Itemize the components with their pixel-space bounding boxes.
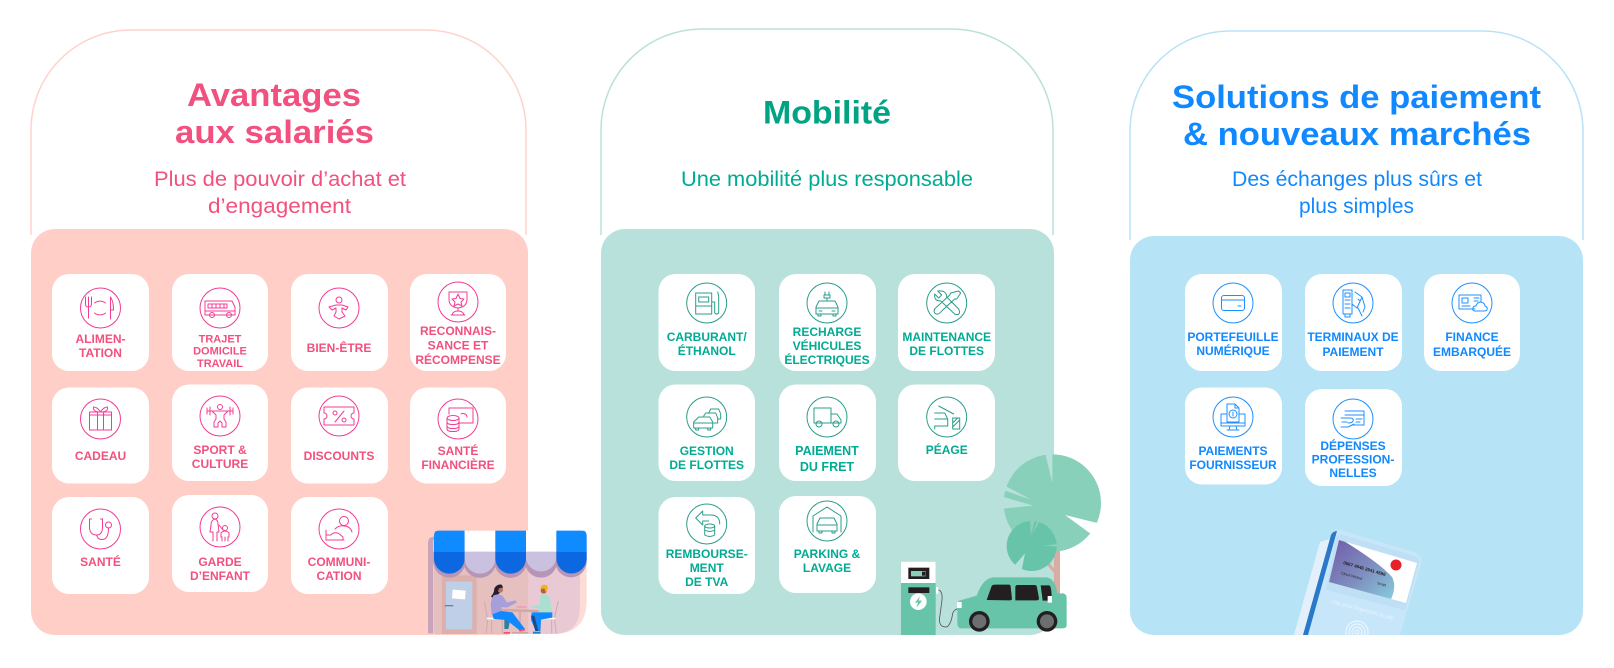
subheading: échanges plus sûrs: plus simples <box>1299 195 1414 218</box>
panel: solutions de paiement <box>1130 31 1583 643</box>
label: PAIEMENTS <box>1198 444 1268 458</box>
tile: santé <box>52 497 149 594</box>
label: ÉLECTRIQUES <box>784 352 870 367</box>
label: FINANCE <box>1445 330 1499 344</box>
icon: plate and cutlery <box>80 288 120 328</box>
tile: maintenance de flottes <box>898 274 995 371</box>
icon: person and megaphone <box>319 509 359 549</box>
label: GESTION <box>680 444 734 458</box>
icon: toll barrier <box>927 397 967 437</box>
heading: mobilité: Mobilité <box>763 94 891 130</box>
charging station <box>901 562 938 635</box>
tile: garde d'enfant <box>172 495 268 592</box>
label: SPORT & <box>193 443 247 457</box>
label: DISCOUNTS <box>304 449 374 463</box>
icon: wallet card <box>1213 283 1253 323</box>
icon: card and cloud <box>1452 283 1492 323</box>
icon: invoice on monitor <box>1213 397 1253 437</box>
label: DÉPENSES <box>1320 438 1386 453</box>
label: EMBARQUÉE <box>1433 344 1511 359</box>
tile: parking et lavage <box>779 496 876 593</box>
label: FINANCIÈRE <box>421 457 495 472</box>
label: LAVAGE <box>803 561 851 575</box>
icon: weightlifter <box>200 396 240 436</box>
credit card <box>1329 540 1417 603</box>
label: TATION <box>79 346 122 360</box>
label: TERMINAUX DE <box>1307 330 1399 344</box>
icon: coins and return arrow <box>687 504 727 544</box>
label: MENT <box>690 561 724 575</box>
device back <box>1294 535 1342 635</box>
teal background block <box>601 229 1054 635</box>
label: DE FLOTTES <box>669 458 744 472</box>
tile: cadeau <box>52 388 149 484</box>
icon: stethoscope <box>80 509 120 549</box>
label: ALIMEN- <box>76 332 126 346</box>
icon: truck <box>807 397 847 437</box>
label: SANCE ET <box>428 338 489 352</box>
tile: paiements fournisseur <box>1185 388 1282 484</box>
tree <box>1003 452 1103 595</box>
tile: remboursement de tva <box>658 497 755 594</box>
fingerprint prompt: Use your fingerprint to pay <box>1330 599 1395 622</box>
heading: avantages aux salariés: Avantages <box>187 77 361 113</box>
icon: parent and child <box>200 507 240 547</box>
label: D’ENFANT <box>190 569 251 583</box>
label: GARDE <box>198 555 242 569</box>
tile: gestion de flottes <box>658 384 755 481</box>
label: PAIEMENT <box>795 444 859 458</box>
label: PORTEFEUILLE <box>1187 330 1279 344</box>
label: PARKING & <box>794 547 861 561</box>
icon: electric car <box>807 283 847 323</box>
car <box>957 577 1067 632</box>
tile: terminaux de paiement <box>1305 274 1402 371</box>
label: PAIEMENT <box>1322 345 1384 359</box>
label: NUMÉRIQUE <box>1196 343 1270 358</box>
icon: discount coupon <box>319 396 359 436</box>
illustration: shop with people <box>428 531 587 634</box>
label: CARBURANT/ <box>667 330 747 344</box>
illustration: charging station, car and tree <box>901 452 1103 635</box>
tile: recharge véhicules électriques <box>779 274 876 371</box>
label: TRAVAIL <box>197 358 243 370</box>
credit card: Script <box>1377 581 1386 587</box>
label: PROFESSION- <box>1312 452 1394 466</box>
label: RECHARGE <box>793 325 861 339</box>
label: NELLES <box>1329 466 1377 480</box>
label: TRAJET <box>199 334 242 346</box>
icon: cars fleet <box>687 397 727 437</box>
tile: alimentation <box>52 274 149 371</box>
icon: gift <box>80 399 120 439</box>
label: CADEAU <box>75 449 126 463</box>
illustration: payment card and fingerprint device <box>1294 530 1421 643</box>
icon: payment terminal <box>1333 283 1373 323</box>
label: CATION <box>316 569 362 583</box>
credit card: 0567 4846 2941 4586 <box>1343 560 1387 577</box>
subheading: pouvoir d'achat: d’engagement <box>208 195 351 218</box>
icon: hand with card <box>1333 399 1373 439</box>
subheading: échanges plus sûrs: Des échanges plus sûrs et <box>1232 168 1482 191</box>
icon: bus <box>200 288 240 328</box>
label: DOMICILE <box>193 346 247 358</box>
fingerprint <box>1346 620 1368 635</box>
icon: fuel pump <box>687 283 727 323</box>
label: COMMUNI- <box>308 555 370 569</box>
subheading: mobilité responsable: Une mobilité plus responsable <box>681 168 973 191</box>
tile: trajet domicile travail <box>172 274 268 371</box>
label: DU FRET <box>800 460 854 474</box>
panel: avantages aux salariés <box>31 30 587 635</box>
blue background block <box>1130 236 1583 635</box>
tile: discounts <box>291 388 388 484</box>
tile: finance embarquée <box>1424 274 1520 371</box>
tile: communication <box>291 497 388 594</box>
tile: péage <box>898 384 995 481</box>
subheading: pouvoir d'achat: Plus de pouvoir d’achat et <box>154 168 406 191</box>
tile: paiement du fret <box>779 384 876 481</box>
pink background block <box>31 229 528 635</box>
tile: sport et culture <box>172 384 268 481</box>
label: MAINTENANCE <box>902 330 991 344</box>
icon: wrench and screwdriver <box>927 283 967 323</box>
credit card: Cloud Wicked <box>1341 571 1363 581</box>
label: BIEN-ÊTRE <box>307 340 371 355</box>
panel: mobilité <box>601 29 1103 635</box>
label: FOURNISSEUR <box>1189 458 1277 472</box>
label: REMBOURSE- <box>666 547 748 561</box>
icon: meditation <box>319 288 359 328</box>
heading: solutions de paiement et nouveaux marchés: Solutions de paiement <box>1172 79 1541 115</box>
label: DE TVA <box>685 575 729 589</box>
heading: avantages aux salariés: aux salariés <box>175 114 374 150</box>
label: SANTÉ <box>80 554 121 569</box>
icon: car in garage <box>807 501 847 541</box>
label: DE FLOTTES <box>909 344 984 358</box>
label: ÉTHANOL <box>678 343 736 358</box>
tile: bien-être <box>291 274 388 371</box>
label: PÉAGE <box>926 442 968 457</box>
people at a table <box>484 584 558 634</box>
tile: carburant <box>658 274 755 371</box>
tile: portefeuille numérique <box>1185 274 1282 371</box>
label: RÉCOMPENSE <box>415 352 501 367</box>
label: CULTURE <box>192 457 248 471</box>
heading: solutions de paiement et nouveaux marchés: & nouveaux marchés <box>1183 116 1531 152</box>
label: SANTÉ <box>438 443 478 458</box>
label: VÉHICULES <box>793 338 861 353</box>
device body <box>1305 530 1421 635</box>
label: RECONNAIS- <box>420 324 496 338</box>
tile: santé financière <box>410 388 506 484</box>
icon: trophy <box>438 282 478 322</box>
tile: reconnaissance et récompense <box>410 274 506 371</box>
tile: dépenses professionnelles <box>1305 389 1402 486</box>
icon: financial health <box>438 399 478 439</box>
